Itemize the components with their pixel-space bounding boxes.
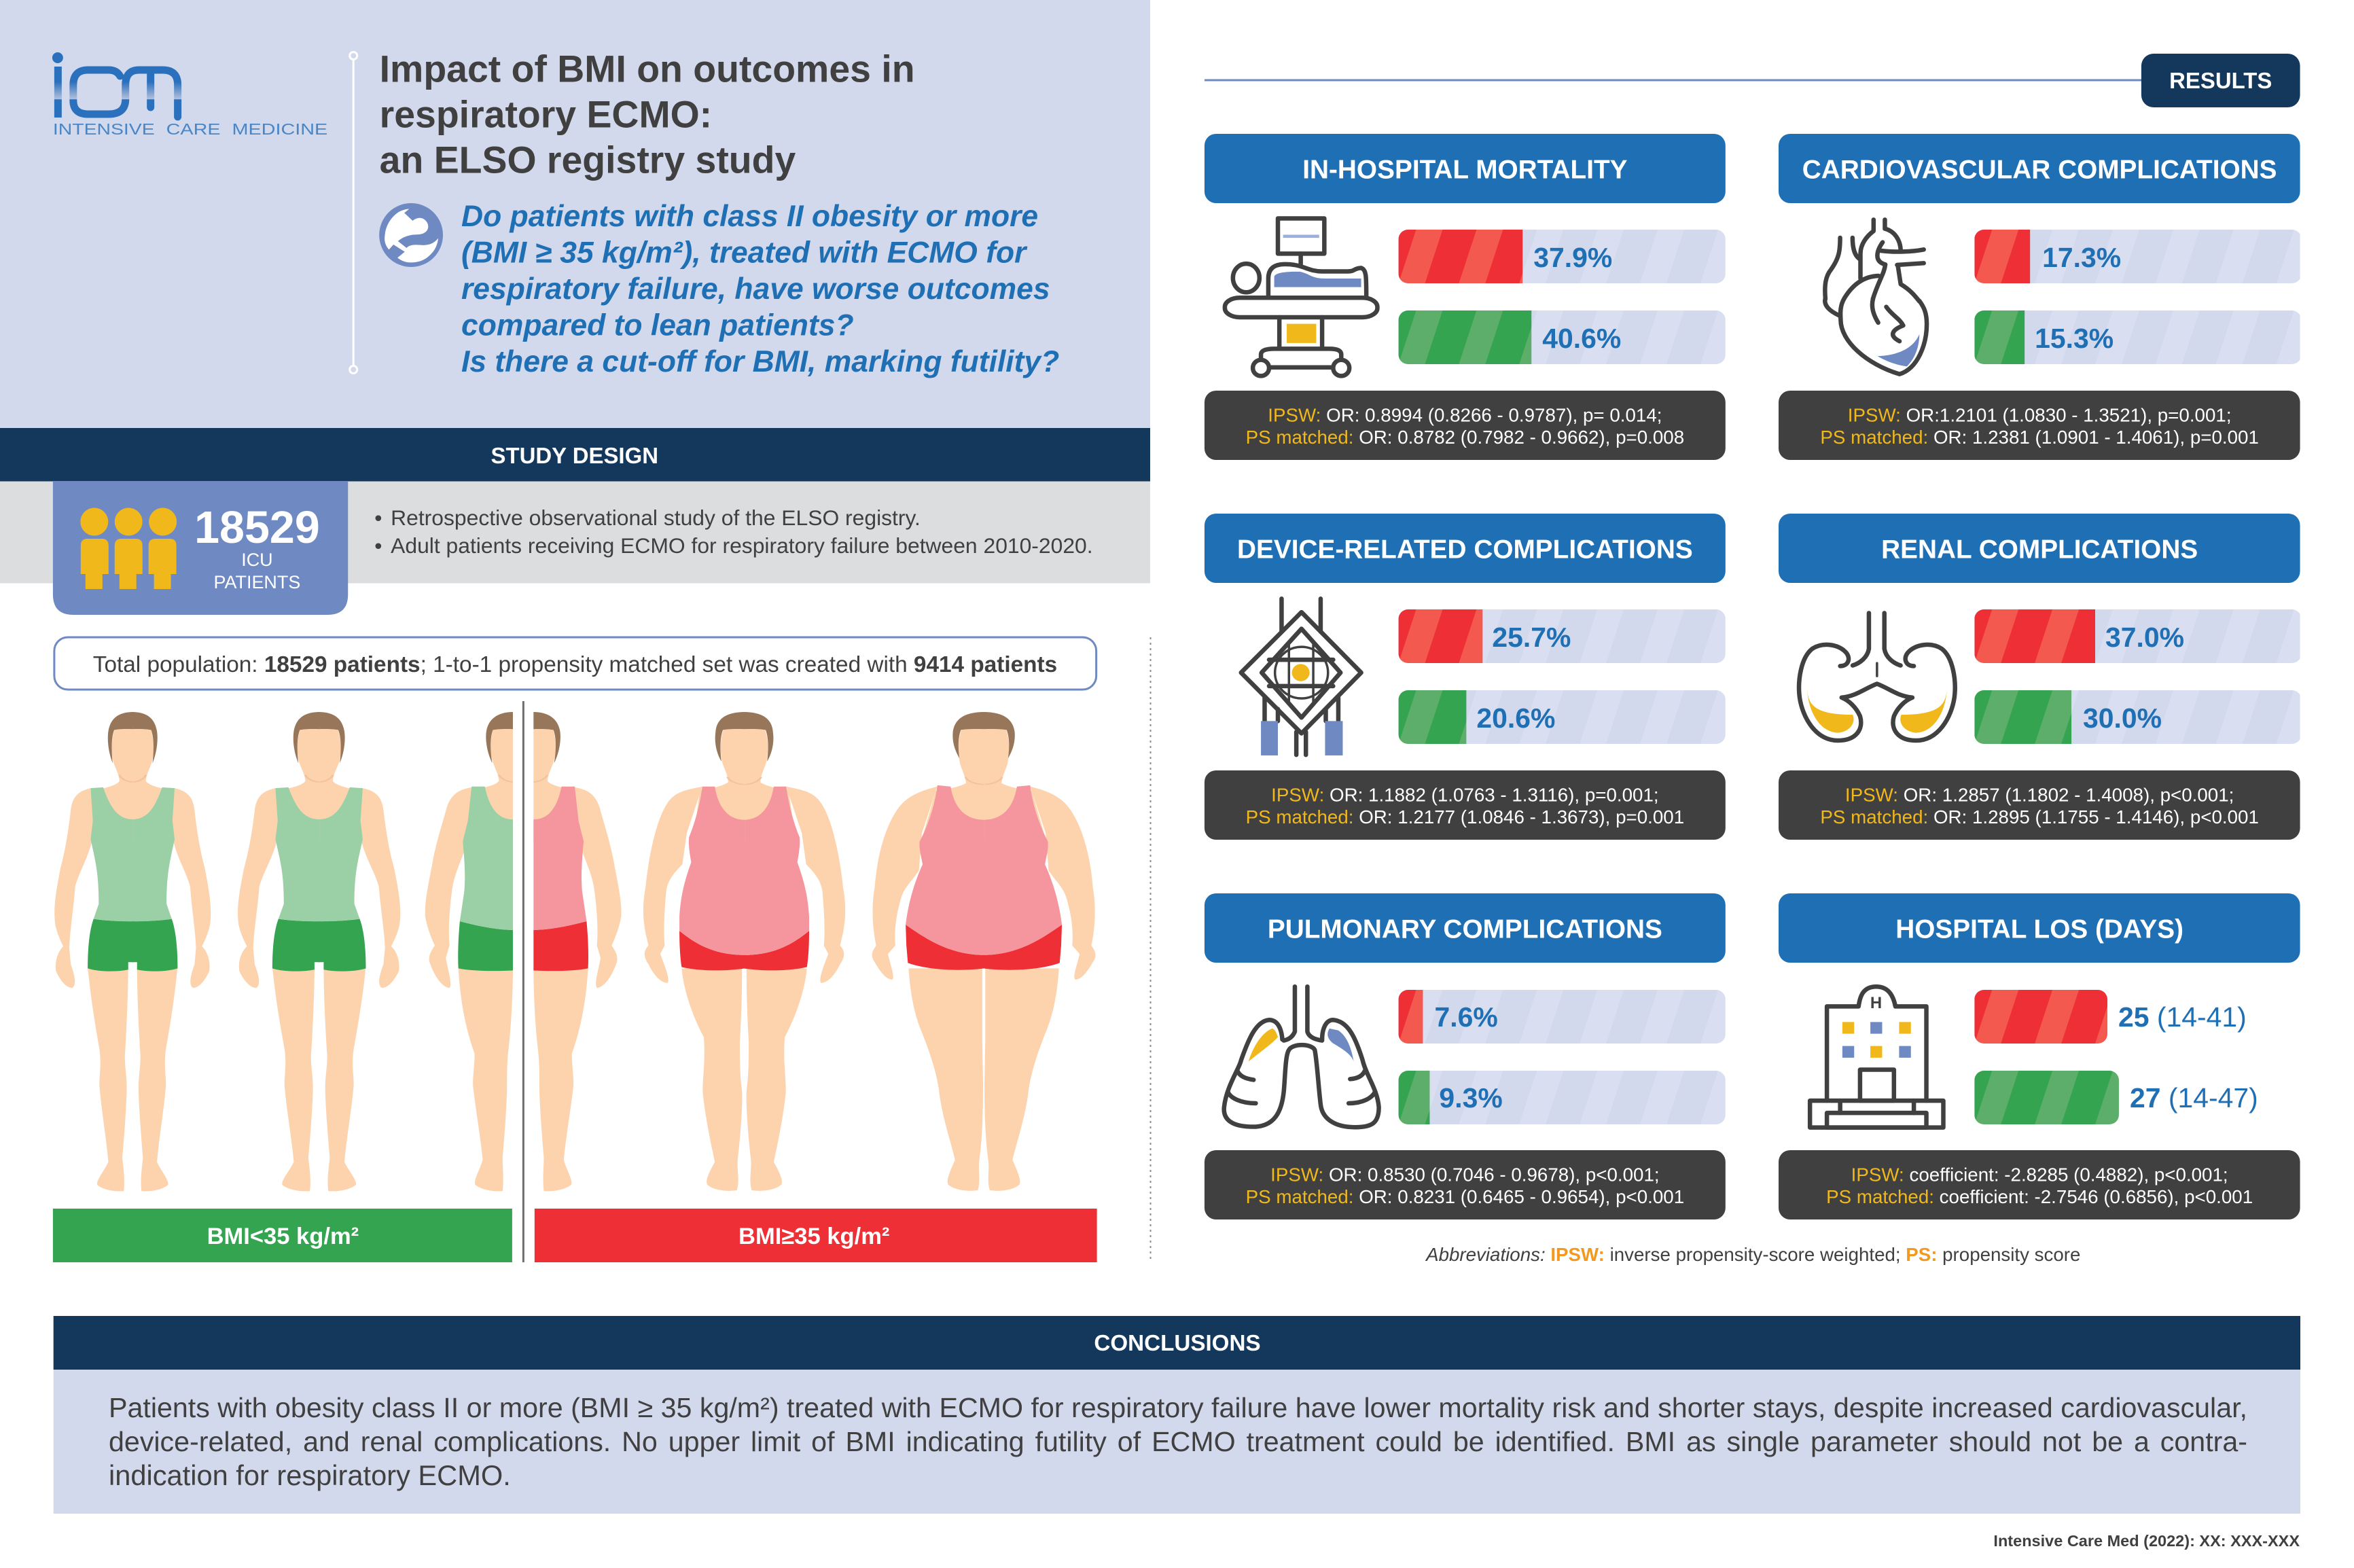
- results column: [1205, 54, 2302, 1265]
- research question: respiratory failure, have worse outcomes: [461, 272, 1050, 306]
- conclusions heading: [54, 1316, 2300, 1370]
- panel: renal complications: PS matched: OR: 1.2895 (1.1755 - 1.4146), p<0.001: [1820, 806, 2259, 827]
- dotted column divider: [1150, 637, 1152, 1262]
- study design heading: STUDY DESIGN: [491, 443, 658, 468]
- icon: oxygenator device: [1241, 599, 1361, 755]
- results heading: [1205, 54, 2300, 107]
- conclusions heading: CONCLUSIONS: [1094, 1331, 1261, 1356]
- results heading: RESULTS: [2169, 68, 2272, 93]
- panel: hospital length of stay: PS matched: coefficient: -2.7546 (0.6856), p<0.001: [1826, 1186, 2253, 1207]
- icon: lungs: [1224, 986, 1379, 1127]
- panel: in-hospital mortality: [1205, 134, 1726, 460]
- bar: BMI≥35 LOS: [1974, 990, 2107, 1044]
- icon: three people: [80, 508, 177, 589]
- research question: (BMI ≥ 35 kg/m²), treated with ECMO for: [461, 236, 1028, 270]
- conclusions text: [109, 1392, 2247, 1491]
- research question: Is there a cut-off for BMI, marking futility?: [461, 345, 1059, 378]
- panel: hospital length of stay: IPSW: coefficient: -2.8285 (0.4882), p<0.001;: [1851, 1164, 2228, 1186]
- figure: split person, red half: [533, 712, 622, 1191]
- figure: obese person 1: [643, 712, 845, 1191]
- label: BMI below 35: BMI<35 kg/m²: [207, 1224, 359, 1249]
- panel: in-hospital mortality: 40.6%: [1542, 323, 1621, 354]
- icon: kidneys: [1799, 613, 1955, 741]
- icon: heart, lower body: [1825, 298, 1927, 374]
- patients count card: PATIENTS: [214, 572, 300, 592]
- statistics box: [1205, 770, 1726, 840]
- patients count card: ICU: [241, 550, 273, 570]
- bar: BMI<35 mortality: [1398, 310, 1726, 364]
- bar: BMI≥35 pulmonary: [1398, 990, 1726, 1044]
- patients count card: [53, 481, 348, 615]
- label: BMI at least 35: BMI≥35 kg/m²: [738, 1224, 889, 1249]
- panel: cardiovascular complications: 17.3%: [2042, 242, 2121, 273]
- bar: BMI<35 device: [1398, 690, 1726, 744]
- panel: pulmonary complications: PS matched: OR: 0.8231 (0.6465 - 0.9654), p<0.001: [1246, 1186, 1684, 1207]
- study design heading: [0, 428, 1150, 481]
- vertical separator: [350, 52, 357, 374]
- bar: BMI≥35 cardiovascular: [1974, 230, 2300, 283]
- panel: in-hospital mortality: 37.9%: [1533, 242, 1612, 273]
- panel: renal complications: 30.0%: [2083, 702, 2162, 734]
- study design bullets: •: [374, 533, 382, 558]
- study design bullets: [374, 505, 1093, 558]
- conclusions panel: [54, 1370, 2300, 1514]
- research question: [461, 200, 1059, 378]
- statistics box: [1779, 391, 2300, 460]
- panel: pulmonary complications: IPSW: OR: 0.8530 (0.7046 - 0.9678), p<0.001;: [1270, 1164, 1660, 1186]
- statistics box: [1205, 1150, 1726, 1219]
- header panel background: [0, 0, 1150, 428]
- panel: hospital length of stay: 25 (14-41): [2118, 1001, 2247, 1033]
- panel: device-related complications: [1205, 514, 1726, 840]
- figure: lean person 1: [54, 712, 211, 1191]
- figure: lean person 2: [238, 712, 400, 1191]
- panel: cardiovascular complications: IPSW: OR:1.2101 (1.0830 - 1.3521), p=0.001;: [1848, 404, 2232, 426]
- bar: BMI<35 cardiovascular: [1974, 310, 2300, 364]
- icon: ECMO bed: [1225, 218, 1377, 376]
- abbreviations note: Abbreviations: IPSW: inverse propensity-score weighted; PS: propensity score: [1425, 1244, 2080, 1265]
- icon: question arrows: [379, 203, 443, 267]
- statistics box: [1779, 1150, 2300, 1219]
- panel: hospital length of stay: 27 (14-47): [2130, 1082, 2258, 1113]
- panel: device-related complications: 25.7%: [1492, 622, 1571, 653]
- figure: split person, green half: [425, 712, 513, 1191]
- study design bullets: Retrospective observational study of the ELSO registry.: [391, 505, 921, 530]
- label: BMI below 35: [53, 1209, 512, 1262]
- conclusions text: Patients with obesity class II or more (BMI ≥ 35 kg/m²) treated with ECMO for respiratory failure have lower mortality risk and shorter stays, despite increased cardiovascular,: [109, 1392, 2247, 1423]
- panel: renal complications: RENAL COMPLICATIONS: [1881, 535, 2198, 565]
- bar: BMI<35 renal: [1974, 690, 2300, 744]
- title: an ELSO registry study: [380, 139, 796, 181]
- panel: pulmonary complications: 9.3%: [1439, 1082, 1503, 1113]
- bar: BMI≥35 mortality: [1398, 230, 1726, 283]
- title: Impact of BMI on outcomes in: [380, 48, 915, 90]
- panel: renal complications: 37.0%: [2105, 622, 2184, 653]
- panel: hospital length of stay: [1779, 893, 2300, 1219]
- figure: obese person 2: [872, 712, 1096, 1191]
- panel: pulmonary complications: 7.6%: [1434, 1001, 1498, 1033]
- conclusions text: indication for respiratory ECMO.: [109, 1459, 511, 1491]
- panel: pulmonary complications: PULMONARY COMPLICATIONS: [1268, 914, 1662, 944]
- title: respiratory ECMO:: [380, 93, 712, 136]
- panel: pulmonary complications: [1205, 893, 1726, 1219]
- panel: hospital length of stay: H: [1870, 994, 1882, 1012]
- panel: in-hospital mortality: PS matched: OR: 0.8782 (0.7982 - 0.9662), p=0.008: [1246, 427, 1684, 448]
- patients count card: 18529: [194, 503, 320, 553]
- panel: in-hospital mortality: IN-HOSPITAL MORTALITY: [1302, 155, 1628, 185]
- panel: device-related complications: IPSW: OR: 1.1882 (1.0763 - 1.3116), p=0.001;: [1271, 784, 1659, 806]
- logo: ICM Intensive Care Medicine: CARE: [166, 120, 221, 138]
- bar: BMI<35 LOS: [1974, 1071, 2119, 1124]
- left column: [0, 0, 1151, 1262]
- logo: ICM Intensive Care Medicine: [52, 52, 327, 138]
- panel: cardiovascular complications: PS matched: OR: 1.2381 (1.0901 - 1.4061), p=0.001: [1820, 427, 2259, 448]
- panel: cardiovascular complications: CARDIOVASCULAR COMPLICATIONS: [1802, 155, 2277, 185]
- study design bullets: Adult patients receiving ECMO for respiratory failure between 2010-2020.: [391, 533, 1093, 558]
- icon: hospital: [1810, 986, 1943, 1128]
- bar: BMI≥35 device: [1398, 609, 1726, 663]
- research question: Do patients with class II obesity or more: [461, 200, 1038, 233]
- study design bullets: •: [374, 505, 382, 530]
- BMI divider: [522, 701, 524, 1262]
- panel: cardiovascular complications: [1779, 134, 2302, 460]
- body figures: [54, 712, 1096, 1191]
- panel: cardiovascular complications: 15.3%: [2035, 323, 2114, 354]
- panel: hospital length of stay: HOSPITAL LOS (DAYS): [1895, 914, 2183, 944]
- statistics box: [1205, 391, 1726, 460]
- logo: ICM Intensive Care Medicine: MEDICINE: [232, 120, 327, 138]
- research question: compared to lean patients?: [461, 308, 854, 342]
- panel: device-related complications: 20.6%: [1476, 702, 1555, 734]
- label: BMI at least 35: [535, 1209, 1097, 1262]
- panel: in-hospital mortality: IPSW: OR: 0.8994 (0.8266 - 0.9787), p= 0.014;: [1268, 404, 1662, 426]
- title: [380, 48, 915, 181]
- total population box: Total population: 18529 patients; 1-to-1 propensity matched set was created with 9414 patients: [93, 652, 1057, 677]
- conclusions text: device-related, and renal complications. No upper limit of BMI indicating futility of ECMO treatment could be identified. BMI as single parameter should not be a contra-: [109, 1426, 2247, 1457]
- study design band: [0, 481, 1150, 583]
- logo: ICM Intensive Care Medicine: INTENSIVE: [53, 120, 155, 138]
- statistics box: [1779, 770, 2300, 840]
- icon: heart, upper vessels: [1825, 219, 1924, 301]
- citation: Intensive Care Med (2022): XX: XXX-XXX: [1993, 1532, 2300, 1550]
- bar: BMI<35 pulmonary: [1398, 1071, 1726, 1124]
- total population box: [54, 637, 1096, 690]
- panel: renal complications: IPSW: OR: 1.2857 (1.1802 - 1.4008), p<0.001;: [1845, 784, 2234, 806]
- panel: device-related complications: PS matched: OR: 1.2177 (1.0846 - 1.3673), p=0.001: [1246, 806, 1684, 827]
- panel: device-related complications: DEVICE-RELATED COMPLICATIONS: [1237, 535, 1693, 565]
- panel: renal complications: [1779, 514, 2302, 840]
- bar: BMI≥35 renal: [1974, 609, 2300, 663]
